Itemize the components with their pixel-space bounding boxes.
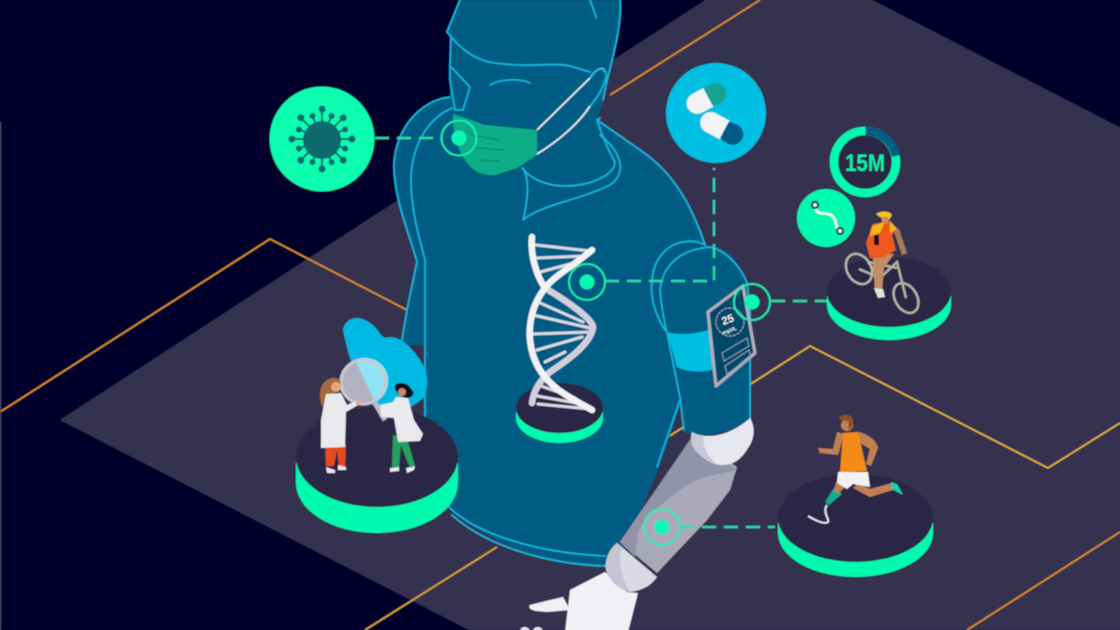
hand — [565, 572, 638, 630]
yellow sleeve — [870, 221, 897, 236]
thumb — [529, 597, 570, 612]
vest — [840, 432, 867, 472]
fingers — [520, 627, 543, 630]
disc side — [778, 523, 933, 577]
face — [398, 388, 406, 396]
disc top — [516, 383, 603, 433]
hair — [320, 378, 341, 408]
shoe — [874, 288, 885, 298]
readout bars — [722, 338, 751, 374]
icon: pills circle — [666, 63, 766, 163]
back shoe — [891, 482, 903, 495]
wrist — [606, 543, 657, 592]
forearm prosthesis — [520, 418, 754, 630]
wrist shadow — [606, 543, 630, 592]
figure: torso, head and arm — [394, 0, 750, 566]
circle — [797, 189, 855, 247]
lens — [340, 359, 386, 405]
pill one — [683, 79, 730, 118]
hair — [395, 383, 413, 398]
shorts — [837, 472, 870, 489]
arm band — [667, 329, 712, 371]
arms — [818, 432, 878, 466]
front thigh — [834, 482, 845, 494]
disc side — [827, 296, 951, 340]
shoes — [326, 465, 346, 473]
bicycle — [841, 249, 924, 317]
target: device — [734, 284, 770, 320]
DNA helix — [530, 237, 593, 410]
face mask — [453, 114, 537, 175]
cyan blob — [343, 318, 427, 412]
front strand — [530, 237, 592, 410]
disc side — [296, 463, 458, 533]
back strand — [532, 288, 593, 403]
virus spikes — [290, 106, 354, 172]
shoes — [390, 466, 415, 473]
trousers — [325, 445, 346, 467]
head — [841, 419, 853, 431]
prosthetic socket — [825, 488, 842, 505]
mask folds — [470, 135, 505, 161]
ring backing — [830, 127, 900, 197]
dial — [716, 308, 744, 336]
target: forearm — [644, 509, 680, 545]
unit: mg/dL — [722, 326, 738, 336]
blue blob behind scientists — [343, 318, 427, 455]
ring track — [834, 131, 896, 193]
helmet — [876, 211, 892, 220]
value: 25 — [720, 312, 736, 328]
disc top — [778, 474, 933, 562]
jersey — [866, 221, 897, 258]
legs — [873, 254, 894, 291]
disc: scientists — [296, 407, 458, 533]
device on arm — [708, 286, 755, 386]
lab coat — [380, 397, 423, 442]
route start — [812, 202, 818, 208]
arm — [892, 226, 907, 255]
dashed connectors — [375, 138, 827, 527]
route — [815, 207, 840, 231]
rim — [341, 360, 385, 404]
circle — [270, 86, 374, 192]
disc top — [296, 407, 458, 507]
ring remaining — [866, 131, 896, 156]
hand — [356, 400, 360, 406]
ear — [590, 69, 606, 106]
icon: virus circle — [270, 86, 374, 192]
forearm shadow — [620, 437, 737, 557]
target: DNA — [569, 264, 605, 300]
value: 15M — [845, 150, 885, 177]
target: mask — [442, 120, 476, 156]
handle — [375, 403, 385, 420]
disc: runner — [778, 474, 933, 577]
forearm — [620, 437, 737, 573]
cyclist — [841, 211, 924, 317]
pill two — [697, 108, 747, 149]
disc side — [516, 412, 603, 443]
phone band — [874, 235, 879, 245]
disc: cyclist — [827, 257, 951, 340]
trousers — [392, 435, 415, 467]
progress ring 15M — [830, 127, 900, 197]
disc: DNA — [516, 383, 603, 443]
runner — [808, 415, 903, 523]
blade prosthesis — [808, 505, 828, 523]
lab coat — [321, 393, 360, 448]
upper cuff — [691, 418, 754, 465]
cuff shadow — [691, 432, 716, 464]
dark wedge — [378, 410, 413, 455]
magnifying glass — [340, 358, 388, 420]
face — [882, 216, 888, 224]
body silhouette — [394, 0, 750, 566]
hair — [839, 415, 853, 430]
device body — [708, 286, 755, 386]
virus core — [303, 121, 341, 159]
route icon circle — [797, 189, 855, 247]
disc top — [827, 257, 951, 327]
scientist left — [320, 378, 360, 473]
scientist right — [380, 383, 423, 473]
circle — [666, 63, 766, 163]
rungs — [533, 245, 590, 409]
route end — [837, 228, 843, 234]
body outlines — [394, 0, 750, 566]
face — [331, 382, 341, 392]
mask ear loops — [537, 69, 605, 154]
back leg — [853, 483, 893, 497]
